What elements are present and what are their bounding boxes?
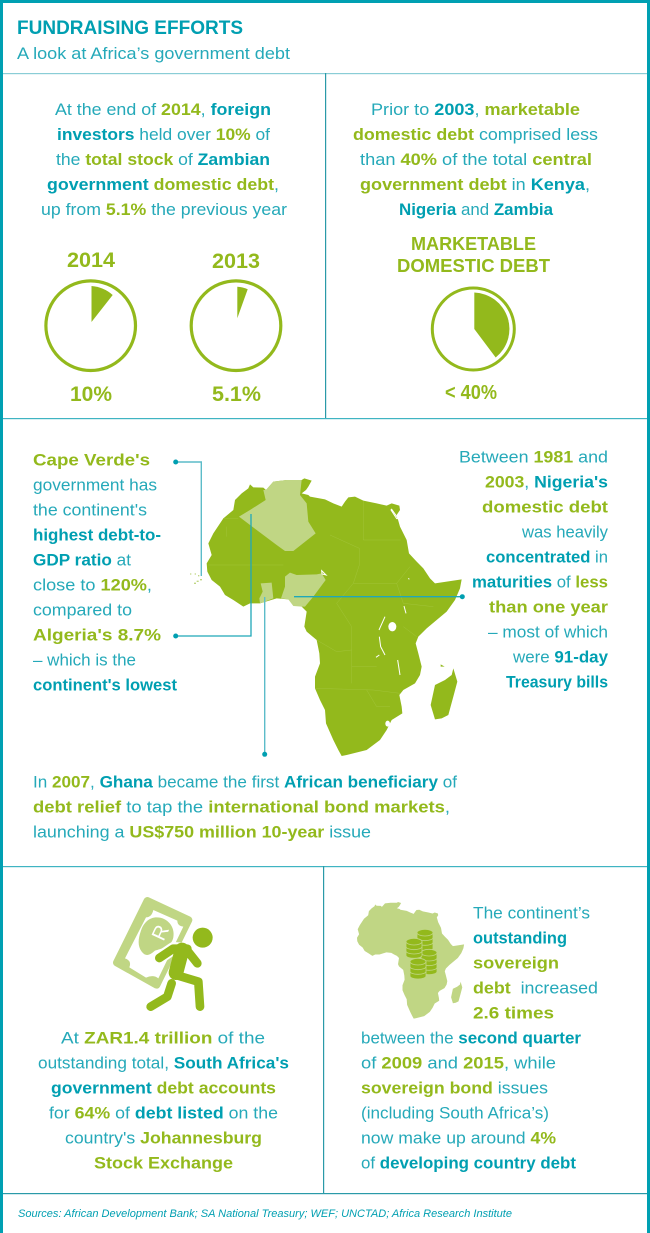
text block: Cape Verde and Algeria: continent's lowest [33,676,177,694]
text block: foreign investors: At the end of 2014, foreign [55,100,271,119]
highlighted country: Algeria [239,480,316,551]
pie chart: 2014 10%: 10% [70,383,112,406]
callout line: Nigeria [294,594,465,599]
text block: prior to 2003: domestic debt comprised less [353,125,598,144]
text block: Nigeria: domestic debt [482,498,608,516]
text block: outstanding sovereign debt: of developing country debt [361,1154,576,1172]
text block: Johannesburg Stock Exchange: Stock Exchange [94,1154,233,1172]
text block: Nigeria: concentrated in [486,548,608,566]
callout line: Algeria [173,514,251,638]
pie chart: 2014 10% [46,249,136,406]
text block: prior to 2003: Nigeria and Zambia [399,200,554,219]
text block: outstanding sovereign debt [361,904,598,1172]
text block: Nigeria: was heavily [521,522,608,542]
text block: foreign investors [41,100,287,219]
text block: Ghana: debt relief to tap the international bond markets , [33,798,450,816]
text block: Nigeria: 2003, Nigeria's [485,472,608,492]
text block: Johannesburg Stock Exchange [38,1028,289,1172]
chart heading: DOMESTIC DEBT [397,256,550,276]
text block: Johannesburg Stock Exchange: country's Johannesburg [65,1128,262,1148]
text block: Cape Verde and Algeria: government has [33,476,157,494]
text block: Cape Verde and Algeria: close to 120%, [33,576,152,594]
panel: Africa map section [33,448,609,842]
chart heading [397,234,550,276]
text block: Cape Verde and Algeria: highest debt-to- [33,526,161,544]
text block: Nigeria: – most of which [488,622,608,642]
title: FUNDRAISING EFFORTS [17,18,243,39]
text block: outstanding sovereign debt: The continent’s [473,904,590,922]
pie chart: 2013 5.1%: 2013 [212,250,260,273]
callout line: Cape Verde [173,460,201,576]
text block: Nigeria [459,448,609,692]
text block: Nigeria: Treasury bills [506,672,608,692]
pie chart: under 40% [432,288,514,404]
text block: Nigeria: maturities of less [472,572,608,592]
text block: Cape Verde and Algeria: Cape Verde's [33,450,150,470]
callout line: Ghana [262,597,267,757]
pie chart: under 40%: < 40% [445,382,497,404]
text block: outstanding sovereign debt: of 2009 and 2015, while [361,1054,556,1072]
highlighted country: Nigeria [281,573,326,607]
highlighted country: Ghana [259,583,273,603]
text block: Cape Verde and Algeria: – which is the [33,650,136,670]
text block: outstanding sovereign debt: between the second quarter [361,1028,581,1048]
text block: outstanding sovereign debt: now make up around 4% [361,1128,556,1148]
text block: Cape Verde and Algeria: compared to [33,600,132,620]
text block: prior to 2003: Prior to 2003, marketable [371,100,580,119]
text block: outstanding sovereign debt: sovereign bond issues [361,1078,548,1098]
text block: Johannesburg Stock Exchange: At ZAR1.4 trillion of the [61,1028,265,1048]
text block: Nigeria: than one year [489,598,608,616]
text block: Johannesburg Stock Exchange: for 64% of debt listed on the [49,1104,278,1122]
panel: Zambian foreign investors [41,100,287,406]
icon: Africa with coin stacks [357,902,464,1019]
text block: outstanding sovereign debt: outstanding [473,928,567,948]
text block: Cape Verde and Algeria [33,450,177,694]
text block: outstanding sovereign debt: debt increased [473,978,598,998]
text block: Cape Verde and Algeria: Algeria's 8.7% [33,626,161,644]
Cape Verde islands [190,573,202,584]
pie chart: 2013 5.1% [191,250,281,406]
pie chart: 2013 5.1%: 5.1% [212,383,261,406]
text block: prior to 2003: government debt in Kenya, [360,175,590,194]
text block: Ghana [33,772,457,842]
icon: person carrying rand note: R [148,922,174,944]
text block: prior to 2003: than 40% of the total central [360,150,592,169]
text block: foreign investors: investors held over 10% of [57,125,270,144]
text block: Johannesburg Stock Exchange: outstanding total, South Africa's [38,1054,289,1072]
icon: person carrying rand note [117,901,213,1007]
text block: Cape Verde and Algeria: the continent's [33,500,147,520]
text block: Nigeria: Between 1981 and [459,448,608,466]
panel: South Africa [38,901,289,1172]
subtitle: A look at Africa’s government debt [17,44,290,63]
text block: Ghana: In 2007, Ghana became the first African beneficiary of [33,772,457,792]
text block: Cape Verde and Algeria: GDP ratio at [33,550,131,570]
map of Africa [190,478,462,756]
chart heading: MARKETABLE [411,234,536,254]
panel: marketable domestic debt [353,100,598,404]
text block: Nigeria: were 91-day [512,648,609,666]
text block: foreign investors: government domestic debt , [47,175,279,194]
panel: sovereign debt [357,902,598,1172]
text block: outstanding sovereign debt: 2.6 times [473,1004,554,1022]
text block: Ghana: launching a US$750 million 10-year issue [33,822,371,842]
pie chart: 2014 10%: 2014 [67,249,115,272]
text block: foreign investors: the total stock of Zambian [56,150,270,169]
text block: outstanding sovereign debt: (including South Africa’s) [361,1104,549,1122]
text block: prior to 2003 [353,100,598,219]
sources: Sources: African Development Bank; SA National Treasury; WEF; UNCTAD; Africa Research Institute [18,1208,512,1220]
text block: Johannesburg Stock Exchange: government debt accounts [51,1078,276,1098]
text block: foreign investors: up from 5.1% the previous year [41,200,287,219]
header [17,18,290,63]
text block: outstanding sovereign debt: sovereign [473,954,559,972]
